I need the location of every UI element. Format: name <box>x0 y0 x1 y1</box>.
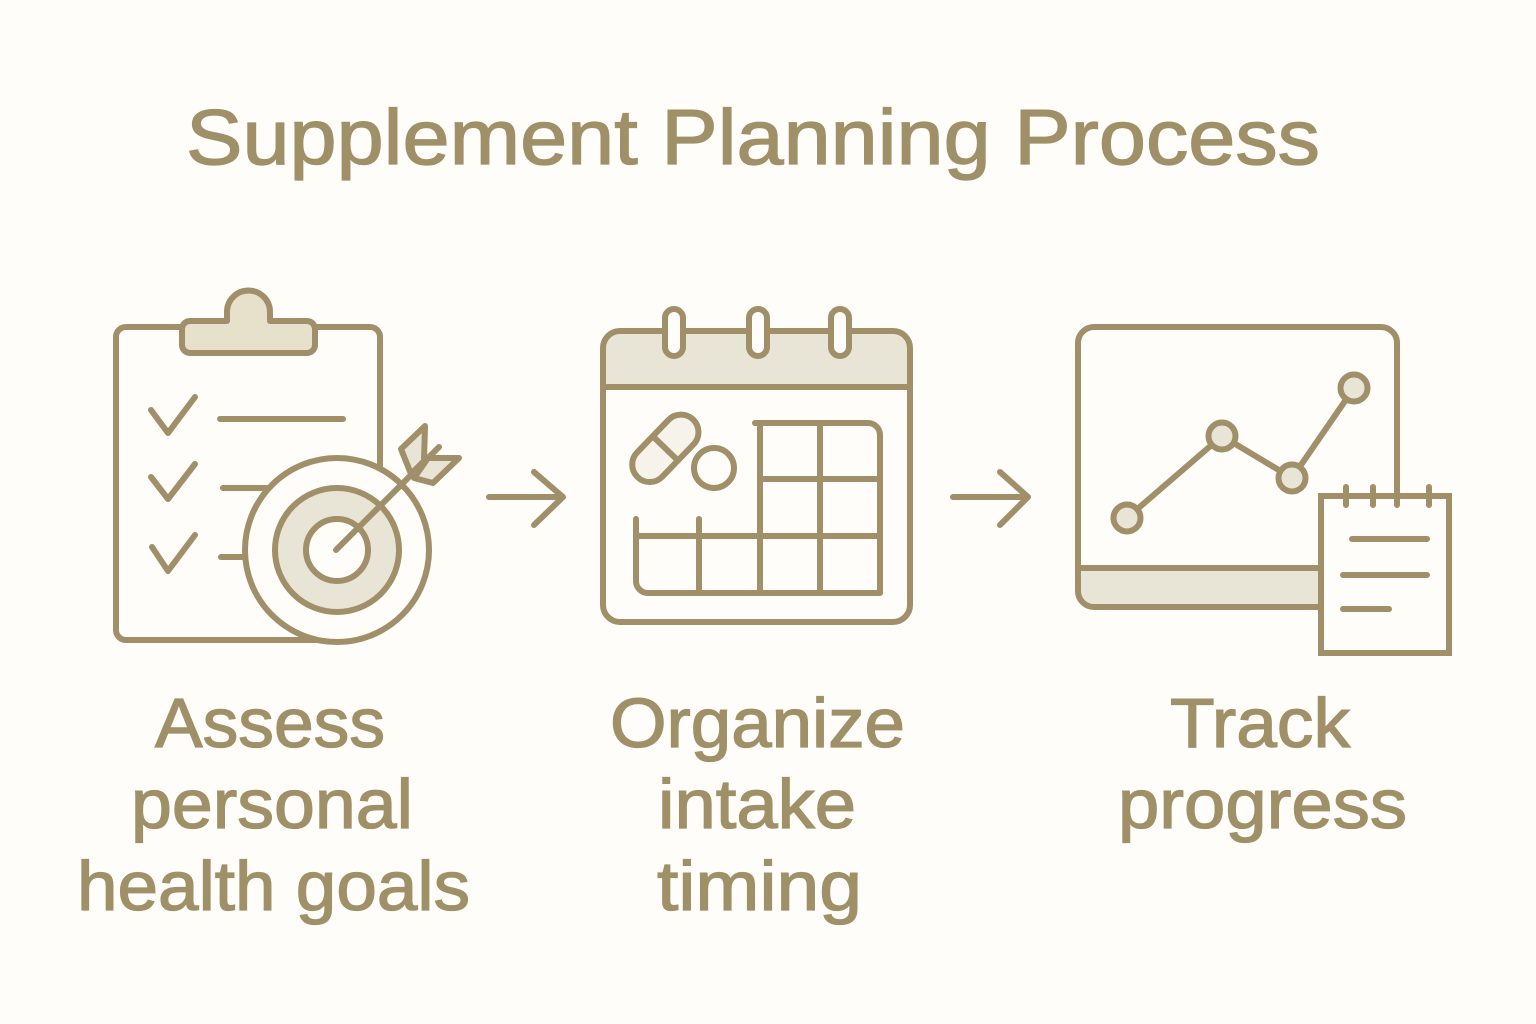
checklist lines <box>220 419 343 557</box>
target middle ring <box>275 488 399 612</box>
schedule grid <box>636 423 880 593</box>
target outer ring <box>245 458 429 642</box>
clipboard board <box>116 327 380 640</box>
label: organize intake timing <box>610 684 905 925</box>
capsule pill <box>625 407 706 489</box>
arrow: step 1 to step 2 <box>489 472 563 525</box>
label: assess personal health goals: Assess <box>155 684 385 762</box>
line chart <box>1114 374 1368 532</box>
label: organize intake timing: intake <box>658 765 856 843</box>
step 3: track <box>1078 327 1449 843</box>
checklist ticks <box>151 397 195 571</box>
calendar rings <box>665 309 849 356</box>
label: track progress: Track <box>1170 684 1351 762</box>
target bullseye <box>306 519 368 581</box>
arrow: step 2 to step 3 <box>953 472 1028 525</box>
label: organize intake timing: timing <box>657 847 862 925</box>
round tablet <box>694 448 734 488</box>
label: assess personal health goals: health goals <box>77 847 470 925</box>
notepad spiral <box>1346 487 1429 505</box>
notepad <box>1321 496 1449 653</box>
clipboard clip <box>182 290 315 353</box>
step 2: organize <box>603 309 910 925</box>
notepad lines <box>1343 539 1427 609</box>
label: track progress <box>1118 684 1407 843</box>
monitor frame <box>1078 327 1397 607</box>
label: organize intake timing: Organize <box>610 684 905 762</box>
arrow in target <box>336 426 459 550</box>
monitor base band <box>1078 568 1321 607</box>
title: Supplement Planning Process <box>186 93 1320 181</box>
label: track progress: progress <box>1118 765 1407 843</box>
calendar header band <box>603 331 910 387</box>
step 1: assess <box>77 290 470 925</box>
icon: calendar with pills <box>603 309 910 622</box>
label: assess personal health goals <box>77 684 470 925</box>
icon: clipboard with target <box>116 290 459 642</box>
calendar body <box>603 331 910 622</box>
label: assess personal health goals: personal <box>131 765 413 843</box>
icon: chart with notepad <box>1078 327 1449 653</box>
